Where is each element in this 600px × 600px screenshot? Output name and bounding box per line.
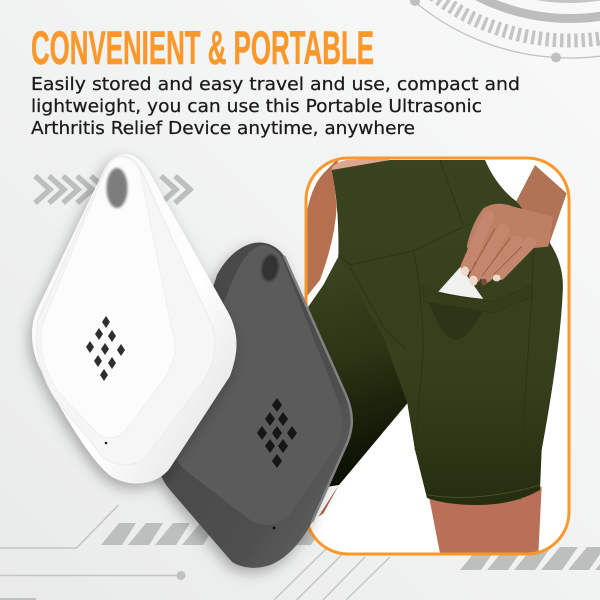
stomach skin [332, 160, 390, 170]
white device face [41, 157, 175, 438]
decorative stripes and circuit lines [0, 505, 600, 600]
description text: Easily stored and easy travel and use, compact and [31, 75, 520, 95]
calf [428, 487, 542, 553]
white device speaker holes [86, 316, 125, 381]
white device hole [106, 168, 128, 208]
decorative chevrons [35, 176, 190, 203]
icon: dark device [158, 242, 352, 568]
pocket opening [428, 303, 483, 340]
icon: white device [32, 154, 236, 483]
description text: lightweight, you can use this Portable Ultrasonic [31, 97, 482, 117]
description text: Arthritis Relief Device anytime, anywhere [31, 119, 415, 139]
fingernails [461, 266, 501, 286]
dark device hole [260, 253, 280, 283]
panel: leggings photo [305, 157, 569, 554]
left arm [308, 160, 338, 296]
forearm [513, 165, 567, 247]
seams [338, 160, 540, 500]
far leg [307, 257, 410, 490]
leggings body [332, 160, 563, 505]
hand [467, 204, 553, 283]
pocket band [423, 285, 532, 313]
dark device face [171, 245, 342, 525]
description text [31, 75, 520, 139]
dark device rim highlight [284, 256, 352, 522]
decorative gauge top right [328, 0, 600, 62]
card in pocket [438, 267, 483, 299]
panel border [306, 158, 569, 554]
dark device speaker holes [257, 398, 297, 468]
white device mid step [37, 156, 215, 465]
